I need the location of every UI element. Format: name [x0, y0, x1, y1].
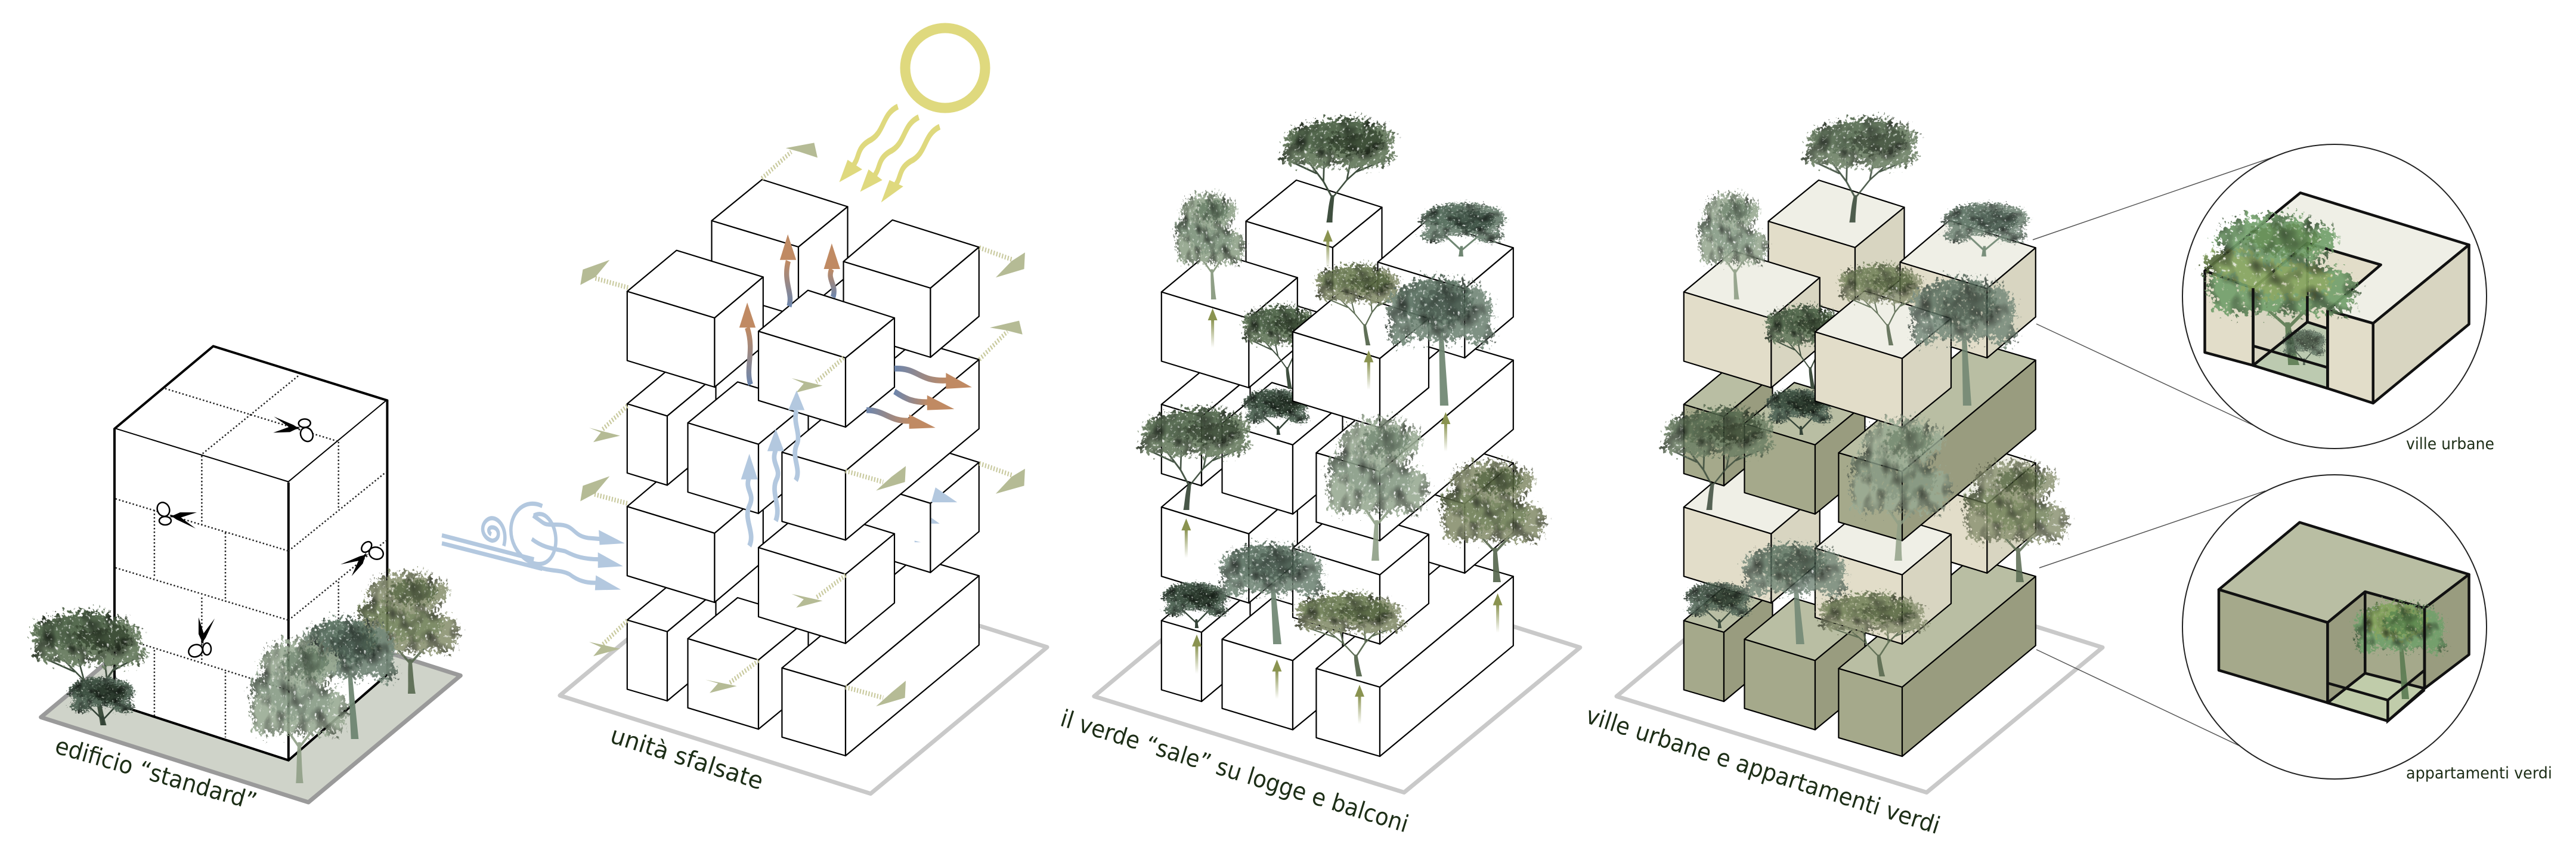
tree	[1386, 278, 1497, 406]
label: edificio standard: edificio “standard”	[52, 732, 259, 816]
tower lower units	[1684, 180, 2036, 756]
building block	[114, 346, 387, 761]
detail: ville urbane	[2033, 144, 2494, 453]
unit edges over tree	[2253, 288, 2327, 388]
tree left	[27, 611, 159, 725]
flow arrows overlay	[442, 107, 1025, 706]
small dark shrub	[2283, 330, 2326, 365]
circle	[2182, 144, 2487, 449]
icon: scissors top	[273, 415, 315, 444]
tree in courtyard	[2197, 215, 2368, 365]
dashed ventilation arrows	[580, 143, 1025, 706]
tree	[1131, 408, 1255, 510]
rising cool air arrows	[741, 391, 957, 546]
leader lines	[2036, 491, 2265, 752]
detail: appartamenti verdi	[2036, 475, 2552, 783]
tree on balcony	[2352, 602, 2451, 699]
tree	[1218, 544, 1329, 644]
tree	[1438, 462, 1549, 582]
sun rays	[839, 107, 940, 202]
tree right front	[250, 640, 348, 783]
tree	[1162, 582, 1230, 628]
L-shaped unit	[2205, 193, 2469, 403]
panel: ville urbane e appartamenti verdi	[1583, 118, 2103, 840]
ground outline	[560, 549, 1047, 794]
tree	[1293, 593, 1413, 676]
tree	[1243, 389, 1311, 435]
front trees	[1654, 118, 2072, 676]
label: ville urbane e appartamenti verdi: ville urbane e appartamenti verdi	[1583, 702, 1943, 840]
label: il verde sale: il verde “sale” su logge e balconi	[1057, 705, 1411, 838]
ground outline	[1617, 550, 2103, 792]
tree	[1419, 203, 1506, 256]
ground outline	[1094, 550, 1580, 792]
tree right middle	[299, 619, 402, 739]
leader lines	[2033, 155, 2279, 426]
icon: scissors left	[155, 500, 197, 528]
notched unit	[2219, 523, 2469, 721]
tree left small	[68, 677, 136, 725]
growth arrows	[1181, 230, 1503, 724]
panel: edificio standard	[27, 346, 462, 816]
ground plot	[41, 591, 460, 802]
tree	[1240, 306, 1329, 389]
label: unità sfalsate: unità sfalsate	[607, 722, 767, 796]
tower of staggered units	[627, 180, 979, 756]
tree	[1273, 118, 1399, 222]
warm air arrows	[739, 234, 972, 429]
back trees	[1763, 306, 1852, 435]
central unit	[1293, 291, 1429, 428]
icon: scissors front	[187, 617, 215, 659]
label: appartamenti verdi: appartamenti verdi	[2406, 764, 2552, 783]
trees on units	[1131, 118, 1549, 676]
trees behind central unit	[1240, 306, 1329, 435]
panel: unità sfalsate	[442, 28, 1047, 796]
tree	[1173, 194, 1249, 299]
central cream unit	[1815, 291, 1951, 428]
tree right back	[356, 573, 463, 694]
tree	[1313, 264, 1410, 345]
label: ville urbane: ville urbane	[2406, 435, 2494, 453]
circle	[2182, 475, 2487, 779]
tree	[1324, 419, 1432, 561]
icon: sun	[905, 28, 985, 108]
panel: il verde sale	[1057, 118, 1580, 838]
tower with white units	[1162, 180, 1513, 756]
balcony edges	[2327, 592, 2425, 721]
icon: scissors right	[340, 534, 389, 584]
wind	[442, 503, 625, 590]
